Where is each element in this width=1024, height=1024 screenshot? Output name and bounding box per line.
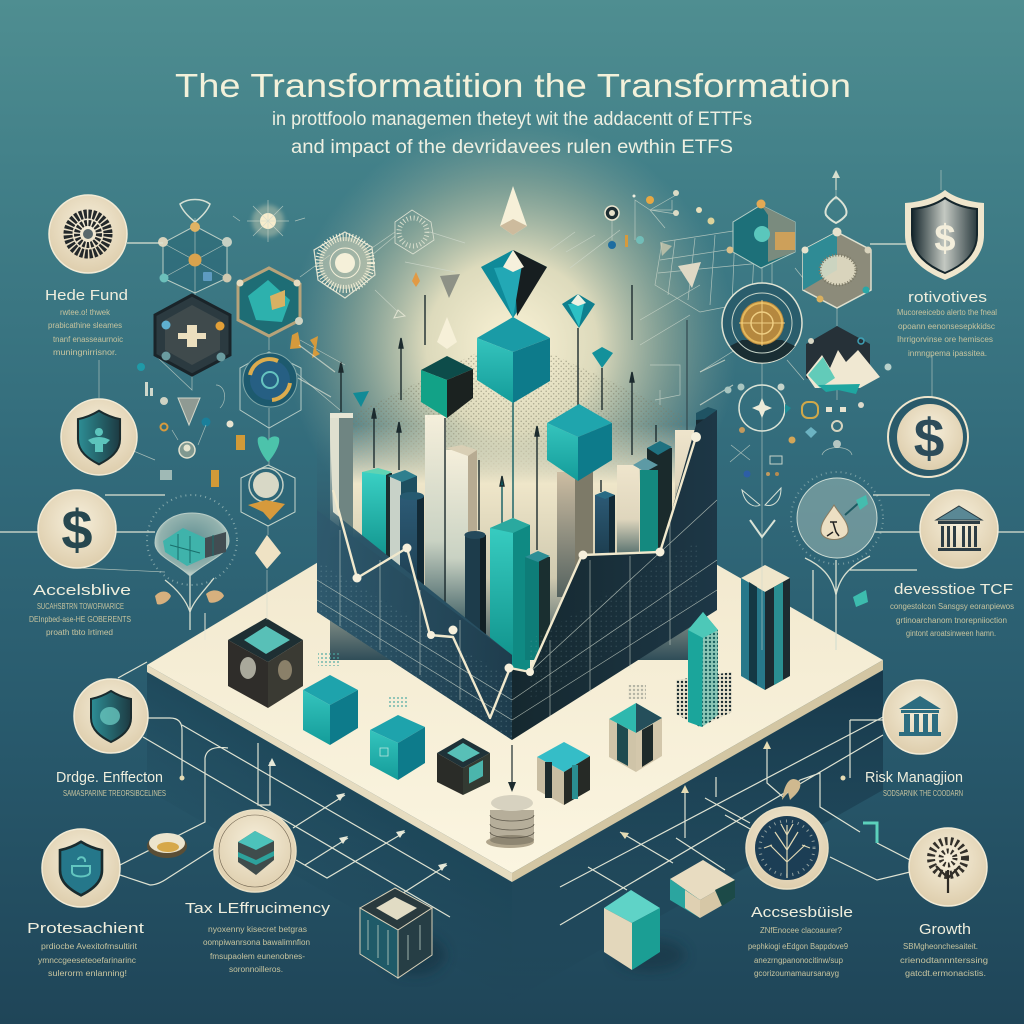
bar: navy cylinder (400, 492, 424, 596)
label: Hede Fund: prabicathine sleames (48, 321, 122, 330)
label: motivatives: Mucoreeicebo alerto the fneal (897, 308, 997, 317)
badge: shield with dollar: $ (934, 218, 956, 260)
bar: tall pale fading (425, 415, 446, 625)
platform top surface (147, 555, 883, 882)
label: Risk Management: SODSARNIK THE COODARN (883, 789, 963, 798)
floating cube: green and black (421, 356, 473, 418)
hexagon network node (158, 222, 232, 293)
ring with white star (724, 384, 791, 431)
badge: dollar left (38, 490, 116, 568)
platform object: teal cube one (303, 652, 358, 745)
label: Accelsblive: DEInpbed-ase-HE GOBERENTS (29, 615, 131, 624)
dark hexagon with flower (137, 295, 230, 375)
label: Growth: Growth (919, 921, 971, 938)
small orange drop (412, 272, 420, 287)
label: devesstioe TCF: devesstioe TCF (894, 581, 1013, 598)
label: Tax efficiency: nyoxenny kisecret betgras (208, 925, 307, 934)
label: Hede Fund: tnanf enasseaurnoic (53, 335, 123, 344)
title block (175, 67, 851, 158)
badge: hedge fund mandala (49, 195, 127, 273)
platform object: dark teal label cube (437, 738, 490, 795)
right top node constellation (605, 190, 702, 249)
platform object: coin stack (486, 745, 534, 848)
platform object: striped box front (537, 742, 590, 805)
label: Protesachient: ymnccgeeseteoefarinarinc (38, 956, 136, 965)
bottom dark patterned cube (360, 888, 445, 978)
icon: cream diamond (255, 535, 281, 569)
connector spine lines (700, 190, 837, 650)
3D bar chart with floating cubes (330, 186, 717, 672)
label: Accessible: pephkiogi eEdgon Bappdove9 (748, 942, 849, 951)
glyph fragments gold (290, 332, 320, 358)
bar: pale slim right (617, 465, 639, 555)
sunburst small (233, 200, 305, 242)
label: Protesachient: sulerorm enlanning! (48, 969, 127, 978)
outline medallion (395, 210, 434, 254)
plant stem with leaves (155, 576, 224, 640)
label: Accessible: ZNfEnocee clacoaurer? (760, 926, 843, 935)
label: Protesachient (27, 920, 145, 978)
floating diamond: right medium (562, 294, 595, 328)
badge: risk management bank (883, 680, 957, 754)
hexagon dial with gold (241, 465, 295, 526)
gold compass medallion (722, 283, 802, 363)
label: Risk Management (865, 769, 963, 798)
badge: shield cup (42, 829, 120, 907)
bar: navy small cylinder (464, 531, 486, 641)
subtitle line one: in prottfoolo managemen theteyt wit the addacentt of ETTFs (272, 109, 752, 130)
badge: shield with dollar (905, 190, 984, 280)
label: motivatives: rotivotives (908, 289, 987, 306)
bubble with teal building (155, 513, 229, 576)
halftone dot field behind chart (352, 335, 682, 500)
bar: dark teal front (525, 551, 550, 660)
label: Growth: crienodtannnterssing (900, 956, 988, 965)
bar: tan center right (557, 472, 593, 597)
left network cluster (100, 200, 395, 640)
side connectors (0, 170, 1024, 572)
dotted halo around bubble (147, 495, 237, 585)
arrow stems over bars (339, 285, 687, 620)
chart left wall (317, 430, 512, 740)
platform object: tall striped box (741, 565, 790, 690)
subtitle line two: and impact of the devridavees rulen ewthin ETFS (291, 137, 733, 158)
right network cluster (700, 170, 892, 650)
label: motivatives: inmngpema ipassitea. (908, 349, 987, 358)
label: Accessible: anezrngpanonocitinw/sup (754, 956, 844, 965)
label: Protesachient: Protesachient (27, 920, 145, 937)
label: Hede Fund: Hede Fund (45, 287, 128, 304)
label: Hede Fund (45, 287, 128, 357)
title: The Transformatition the Transformation (175, 67, 851, 104)
label: motivatives: opoann eenonsesepkkidsc (898, 322, 995, 331)
dark hexagon with mountains (806, 326, 892, 394)
label: motivatives: Ihrrigorvinse ore hemisces (897, 335, 993, 344)
label: Risk Management: Risk Managjion (865, 769, 963, 786)
bars backdrop (330, 425, 698, 660)
icon: pendant leaf (180, 200, 210, 222)
performance line with nodes (333, 432, 701, 718)
label: Hede Fund: rwtee.o! thwek (60, 308, 111, 317)
label: Tax efficiency: oompiwanrsona bawalimnfion (203, 938, 310, 947)
hexagon: teal and tan (708, 200, 795, 268)
glass bubble with droplet (791, 472, 883, 564)
label: devesstioe TCF (890, 581, 1014, 638)
chart right wall (512, 410, 717, 740)
floating cone: cream (437, 317, 457, 349)
sunburst hexagon (314, 232, 375, 298)
label: Tax efficiency: soronnoilleros. (229, 965, 283, 974)
label: Growth: gatcdt.ermonacistis. (905, 969, 986, 978)
bar: cream broad (446, 445, 477, 630)
badge: dollar coin right (888, 397, 968, 477)
bar: cream-grey tall left (330, 413, 353, 566)
arrow up (832, 170, 840, 190)
floating cube: right teal (547, 404, 612, 481)
floating diamond: left small (353, 391, 369, 407)
floating cone: grey (440, 274, 460, 298)
platform object: teal cube two (370, 695, 425, 780)
floating diamond: top cream (500, 186, 527, 235)
label: Accelsblive: proath tbto Irtimed (46, 628, 113, 637)
label: Accessible: gcorizoumamaursanayg (754, 969, 839, 978)
small triangle (394, 310, 405, 318)
label: Drdge Enffecton (56, 769, 166, 798)
bar: cream right tall (675, 430, 696, 520)
floating diamond: right small (592, 347, 613, 368)
platform dark side faces (147, 670, 883, 1000)
bottom tall cream and teal box (604, 890, 685, 971)
platform object: patterned dark cube (228, 618, 303, 708)
bar: pair teal-green and black (633, 441, 672, 556)
label: devesstioe TCF: grtinoarchanom tnorepniioction (896, 616, 1007, 625)
bar: big teal front (490, 518, 530, 672)
tan hexagon with teal scene (236, 268, 303, 336)
icon: coin dish (147, 833, 187, 858)
perspective grid sketch (640, 225, 772, 405)
bar: navy right (595, 491, 615, 555)
bar: black tall right (696, 407, 717, 553)
connector spine lines (100, 218, 395, 630)
label: Accelsblive: SUCAHSBTRN TOWOFMARICE (37, 602, 124, 611)
label: Drdge Enffecton: SAMASPARINE TREORSIBCELINES (63, 789, 166, 798)
bar: pale and dark teal (388, 470, 417, 576)
label: Accessible (748, 904, 853, 978)
label: Tax efficiency (185, 900, 331, 974)
bottom connector lines and arrows (118, 662, 910, 925)
label: Accelsblive: Accelsblive (33, 582, 131, 599)
badge: shield teal (74, 679, 148, 753)
badge: shield person (61, 399, 137, 475)
label: Growth (900, 921, 988, 978)
label: Tax efficiency: Tax LEffrucimency (185, 900, 331, 917)
platform object: striped box teal top (609, 685, 662, 772)
central light glow (287, 120, 737, 570)
label: Protesachient: prdiocbe Avexitofmsultirit (41, 942, 138, 951)
platform object: teal tower with dots (676, 612, 732, 727)
label: Drdge Enffecton: Drdge. Enffecton (56, 769, 163, 786)
glow rays lines (298, 345, 733, 405)
bottom cream and teal cube (670, 860, 735, 918)
hexagon: mesh on tan teal (802, 228, 872, 308)
label: devesstioe TCF: congestolcon Sansgsy eoranpiewos (890, 602, 1014, 611)
plant with teal leaf (805, 556, 870, 650)
icon: teal heart (258, 436, 279, 462)
label: Tax efficiency: fmsupaolem eunenobnes- (210, 952, 305, 961)
badge: dollar left: $ (61, 498, 93, 561)
label: Hede Fund: muningnirrisnor. (53, 348, 117, 357)
medallion with gold crescents (240, 352, 301, 428)
badge: dollar coin right: $ (914, 407, 944, 469)
label: Growth: SBMgheonchesaiteit. (903, 942, 978, 951)
label: motivatives (897, 289, 997, 358)
dashed connector sketches (372, 230, 620, 312)
badge: tax efficiency stack (214, 810, 296, 892)
icon: pendant (825, 197, 847, 223)
bar: teal left (362, 468, 392, 568)
badge: bank right (920, 490, 998, 568)
label: devesstioe TCF: gintont aroatsinween hamn. (906, 629, 996, 638)
badge: accessible winter tree (746, 807, 828, 889)
floating cube: large teal (477, 317, 550, 403)
small instrument cluster (730, 402, 864, 478)
badge: growth tree (909, 828, 987, 906)
small instrument cluster (145, 382, 245, 487)
label: Accessible: Accsesbüisle (751, 904, 853, 921)
floating diamond: large teal (481, 250, 547, 318)
label: Accelsblive (29, 582, 131, 637)
top center sketches (314, 190, 772, 405)
leaves and chevron (742, 488, 781, 537)
